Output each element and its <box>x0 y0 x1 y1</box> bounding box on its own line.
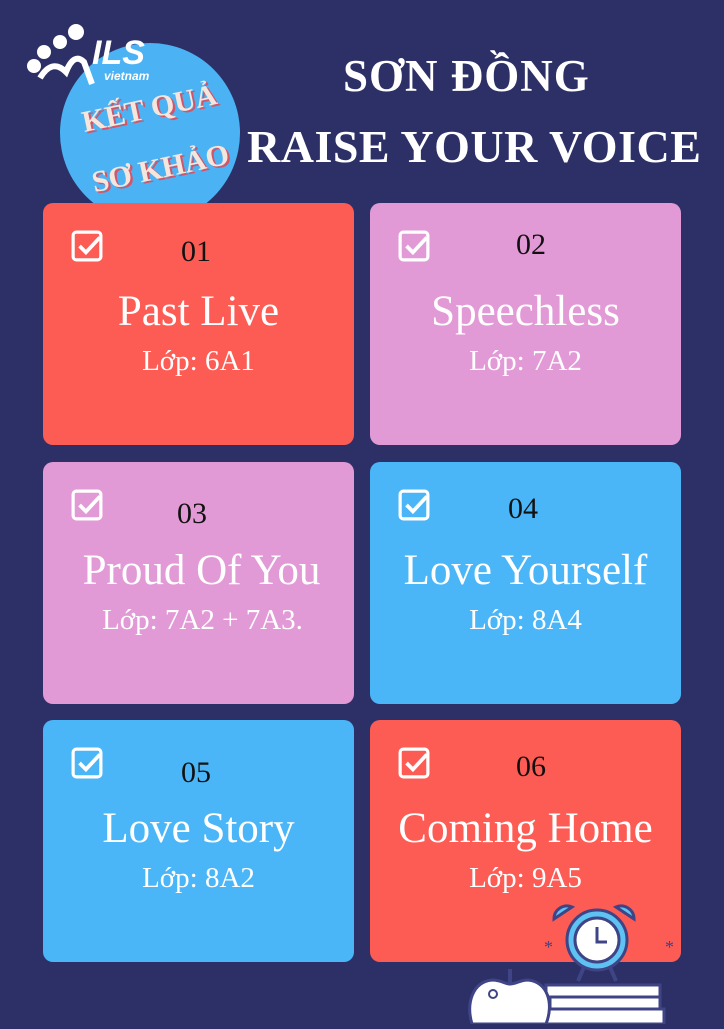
logo <box>27 24 150 85</box>
title: SƠN ĐỒNG <box>343 51 590 101</box>
card 05: Lớp: 8A2 <box>142 862 255 894</box>
circle text <box>79 78 232 199</box>
header circle <box>60 43 240 223</box>
card 06: 06 <box>516 750 546 783</box>
circle text: SƠ KHẢO <box>89 138 232 199</box>
card 06: Coming Home <box>398 805 653 852</box>
card 01: Past Live <box>118 288 279 335</box>
illustration: clock, apple, books: * <box>544 937 553 957</box>
illustration: clock, apple, books <box>468 904 674 1024</box>
card 01 <box>43 203 354 445</box>
illustration: clock, apple, books: * <box>665 937 674 957</box>
card 02: 02 <box>516 228 546 261</box>
card 05 <box>43 720 354 962</box>
card 03: Proud Of You <box>83 547 320 594</box>
card 04: Love Yourself <box>404 547 647 594</box>
card 02: Lớp: 7A2 <box>469 345 582 377</box>
card 04: 04 <box>508 492 538 525</box>
card 04 <box>370 462 681 704</box>
logo: vietnam <box>104 69 150 83</box>
card 03: Lớp: 7A2 + 7A3. <box>102 604 303 636</box>
card 02 <box>370 203 681 445</box>
card 06: Lớp: 9A5 <box>469 862 582 894</box>
card 01: 01 <box>181 235 211 268</box>
card 02: Speechless <box>431 288 620 335</box>
subtitle: RAISE YOUR VOICE <box>247 121 701 172</box>
circle text: KẾT QUẢ <box>79 78 220 139</box>
card 05: 05 <box>181 756 211 789</box>
card 05: Love Story <box>102 805 295 852</box>
card 03: 03 <box>177 497 207 530</box>
card 06 <box>370 720 681 962</box>
card 04: Lớp: 8A4 <box>469 604 582 636</box>
card 01: Lớp: 6A1 <box>142 345 255 377</box>
logo: ILS <box>92 34 145 72</box>
card 03 <box>43 462 354 704</box>
